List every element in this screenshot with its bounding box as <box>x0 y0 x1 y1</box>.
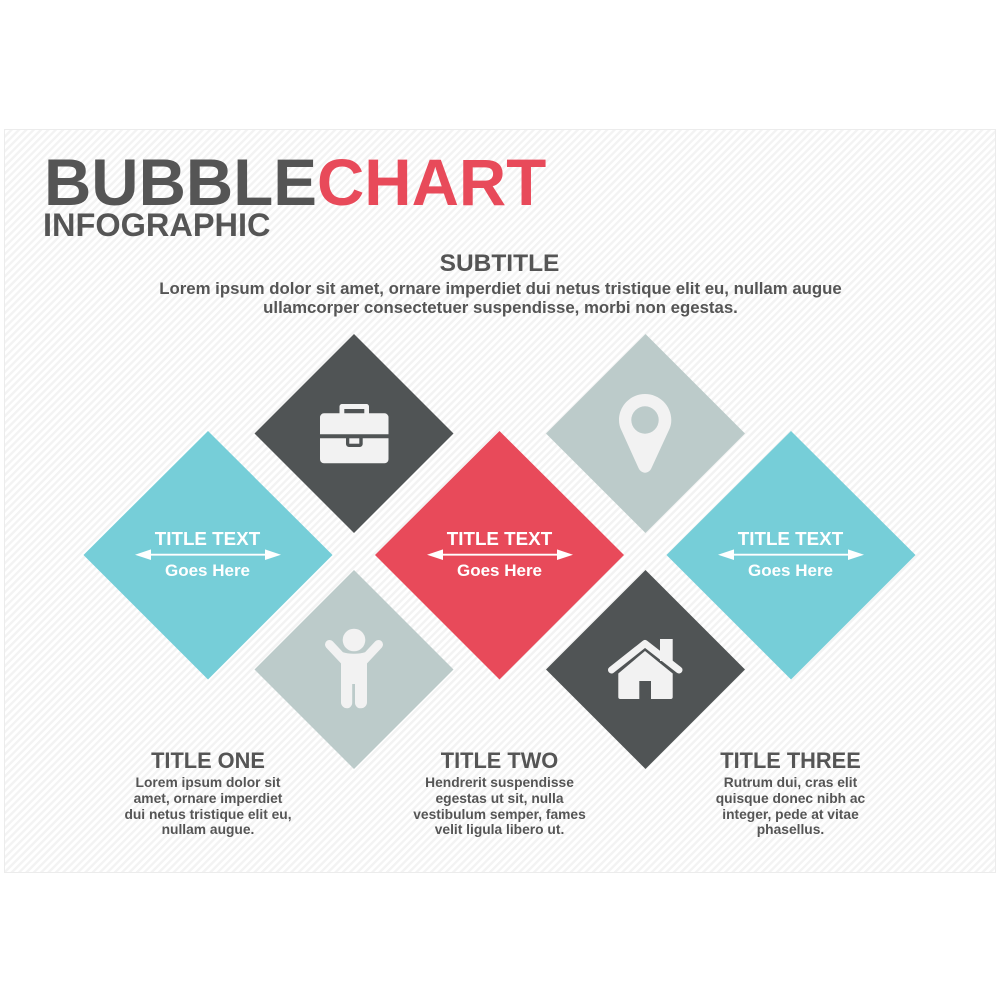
arrow: double-headed <box>718 549 864 560</box>
text block: title two: TITLE TWO <box>441 748 558 773</box>
text block: title three: phasellus. <box>757 822 824 837</box>
heading: subtitle: SUBTITLE <box>440 250 559 277</box>
title <box>44 146 546 219</box>
text block: title one <box>124 748 292 837</box>
text block: title one: TITLE ONE <box>151 748 265 773</box>
panel: centre red diamond <box>375 431 624 680</box>
text: goes here: Goes Here <box>748 561 833 580</box>
text block: title three: integer, pede at vitae <box>722 807 859 822</box>
text block: title three: TITLE THREE <box>720 748 861 773</box>
text block: title one: Lorem ipsum dolor sit <box>136 775 281 790</box>
panel: briefcase diamond <box>254 334 454 533</box>
text block: title two: Hendrerit suspendisse <box>425 775 574 790</box>
text block: title one: amet, ornare imperdiet <box>134 791 283 806</box>
text block: title two <box>413 748 586 837</box>
icon: person <box>330 629 378 708</box>
title: BUBBLE <box>44 146 317 219</box>
text: title text: TITLE TEXT <box>155 528 261 549</box>
panel: location diamond <box>546 334 745 533</box>
text block: title three: quisque donec nibh ac <box>716 791 866 806</box>
icon: briefcase <box>320 404 388 463</box>
panel: striped background <box>4 130 996 872</box>
text block: title three: Rutrum dui, cras elit <box>724 775 858 790</box>
text: goes here: Goes Here <box>457 561 542 580</box>
text block: title two: velit ligula libero ut. <box>435 822 564 837</box>
panel: house diamond <box>546 570 745 769</box>
text block: title two: vestibulum semper, fames <box>413 807 586 822</box>
text: title text: TITLE TEXT <box>738 528 844 549</box>
text: goes here: Goes Here <box>165 561 250 580</box>
text block: title two: egestas ut sit, nulla <box>435 791 564 806</box>
arrow: double-headed <box>135 549 281 560</box>
text block: intro: Lorem ipsum dolor sit amet, ornare imperdiet dui netus tristique elit eu, nullam augue <box>159 279 842 298</box>
arrow: double-headed <box>427 549 573 560</box>
title: CHART <box>317 146 546 219</box>
panel: person diamond <box>254 570 454 769</box>
panel: right blue diamond <box>666 431 916 680</box>
text block: title three <box>716 748 866 837</box>
heading: infographic: INFOGRAPHIC <box>43 207 270 243</box>
text block: title one: dui netus tristique elit eu, <box>124 807 292 822</box>
text block: title one: nullam augue. <box>162 822 254 837</box>
text block: intro: ullamcorper consectetuer suspendisse, morbi non egestas. <box>263 298 738 317</box>
text block: intro <box>159 279 842 317</box>
text: title text: TITLE TEXT <box>447 528 553 549</box>
panel: left blue diamond <box>84 431 332 680</box>
icon: location pin <box>619 394 671 473</box>
icon: house <box>612 639 679 699</box>
